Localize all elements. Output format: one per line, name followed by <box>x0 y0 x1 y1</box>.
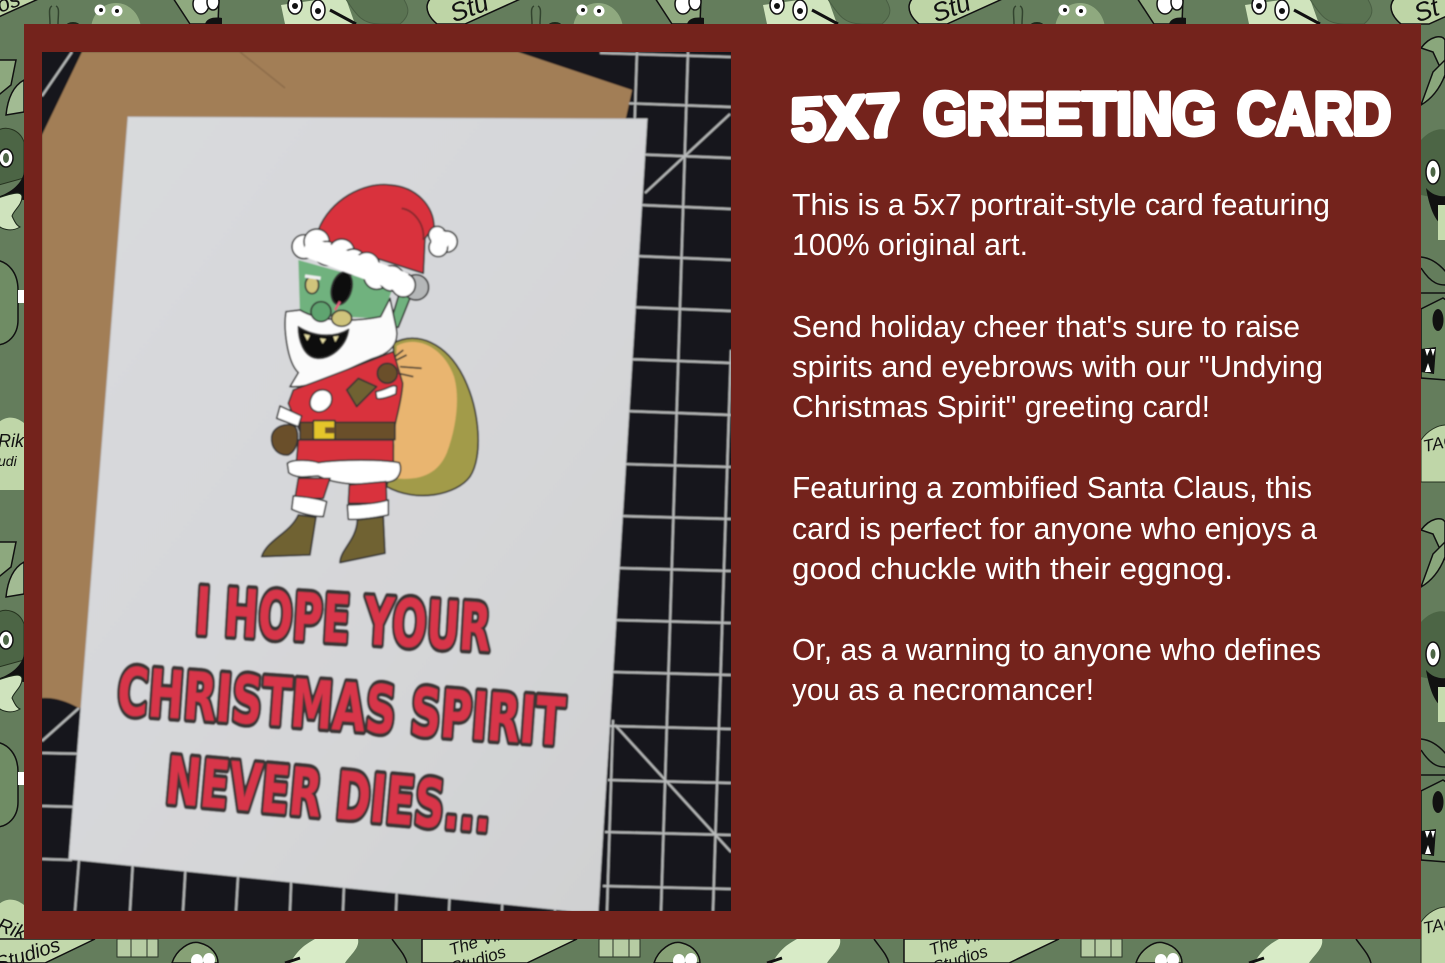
coat hem fur <box>287 460 401 484</box>
text block: necromancer warning <box>792 632 1321 707</box>
text block: holiday cheer: Send holiday cheer that's sure to raise <box>792 309 1300 344</box>
title <box>789 80 1391 154</box>
pattern: bottom strip: The Vik <box>927 923 989 960</box>
envelope <box>42 52 632 708</box>
photo: greeting card on cutting mat <box>40 50 733 913</box>
message line 2: CHRISTMAS SPIRIT <box>115 653 567 761</box>
text block: zombified Santa: card is perfect for anyone who enjoys a <box>792 511 1318 546</box>
message line 1: I HOPE YOUR <box>193 573 493 667</box>
hat fur band <box>292 229 415 297</box>
text block: holiday cheer <box>792 309 1323 424</box>
title: CARD <box>1237 80 1391 148</box>
belt and buckle <box>300 421 395 440</box>
text block: zombified Santa: Featuring a zombified Santa Claus, this <box>792 470 1312 505</box>
text block: holiday cheer: Christmas Spirit" greeting card! <box>792 389 1210 424</box>
text block: intro: 100% original art. <box>792 227 1028 262</box>
text block: zombified Santa: good chuckle with their eggnog. <box>792 551 1233 586</box>
face <box>298 260 393 318</box>
coat <box>288 352 403 467</box>
message line 3: NEVER DIES... <box>163 742 495 848</box>
title: 5X7 <box>789 81 903 154</box>
pattern: top strip <box>0 0 1445 57</box>
pattern: bottom strip: The Vik <box>447 923 509 960</box>
beard <box>285 298 397 387</box>
mouth <box>298 327 349 358</box>
pouf and chest details <box>310 350 422 412</box>
cutting mat <box>40 50 733 913</box>
ear and grey fur <box>389 275 429 327</box>
pattern: bottom strip <box>0 923 1371 963</box>
text block: zombified Santa <box>792 470 1318 586</box>
hat <box>318 185 457 273</box>
sack <box>387 338 478 496</box>
text block: necromancer warning: you as a necromancer! <box>792 672 1094 707</box>
card message <box>115 573 567 848</box>
illustration: zombie Santa <box>262 185 478 563</box>
boots <box>262 515 385 563</box>
text block: intro: This is a 5x7 portrait-style card featuring <box>792 187 1330 222</box>
title: GREETING <box>923 80 1216 148</box>
greeting card <box>69 117 647 911</box>
pattern: left strip <box>0 60 30 963</box>
eyes and nose <box>305 270 356 326</box>
text block: necromancer warning: Or, as a warning to anyone who defines <box>792 632 1321 667</box>
boot cuffs <box>292 496 388 519</box>
text block: intro <box>792 187 1330 262</box>
mitten and cuff <box>272 406 302 455</box>
pattern: right strip <box>1421 37 1445 963</box>
text block: holiday cheer: spirits and eyebrows with our "Undying <box>792 349 1323 384</box>
legs <box>295 478 387 503</box>
